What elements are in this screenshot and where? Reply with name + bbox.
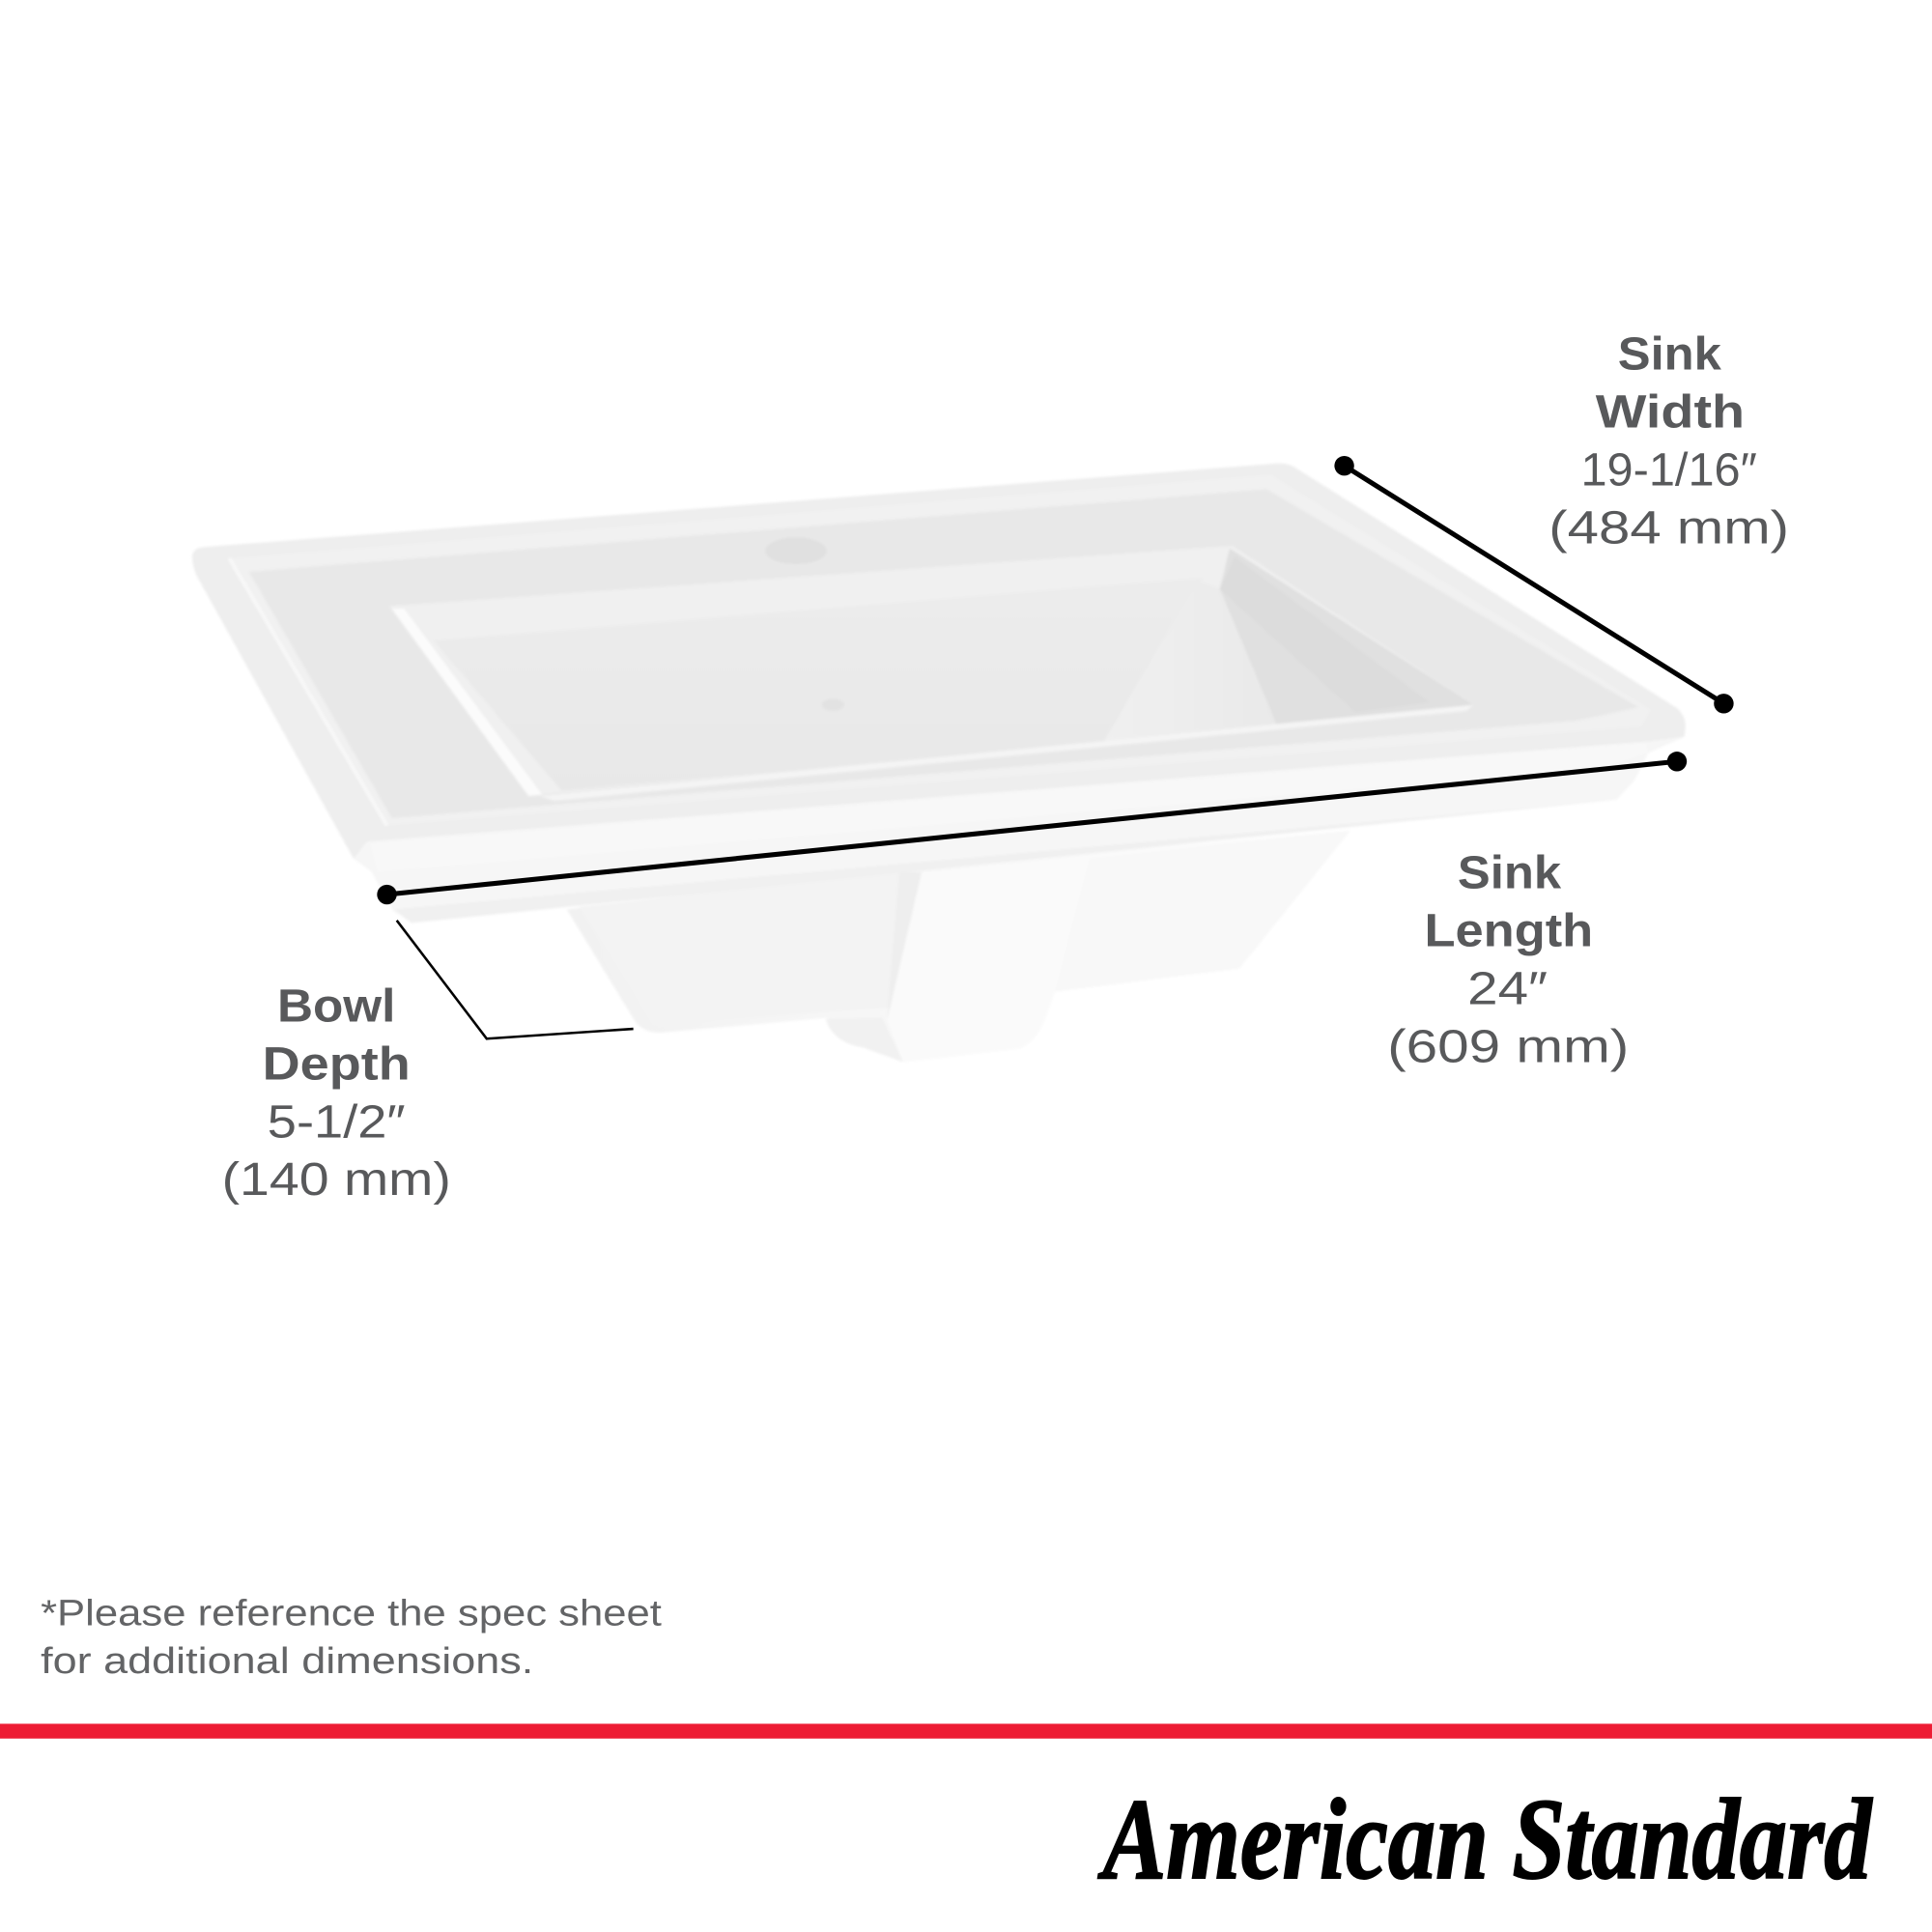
footnote [41,1592,662,1682]
faucet hole [765,537,827,564]
footnote: *Please reference the spec sheet [41,1592,662,1634]
label: sink length: 24″ [1467,963,1548,1015]
label: sink width: Sink [1618,328,1721,381]
label: sink length: Length [1424,905,1593,957]
sink length dimension line [377,752,1687,904]
label: bowl depth: Bowl [277,980,395,1032]
label: sink width [1548,328,1789,554]
label: sink width: (484 mm) [1548,501,1789,554]
bowl depth leader line [397,921,634,1038]
label: bowl depth: 5-1/2″ [268,1095,406,1148]
label: sink length: Sink [1458,847,1561,899]
label: sink width: 19-1/16″ [1580,444,1757,497]
label: sink length [1387,847,1629,1072]
sink top plate [192,464,1686,859]
sink front rim [354,737,1685,923]
label: bowl depth: Depth [263,1037,411,1090]
drain [822,698,844,711]
label: sink length: (609 mm) [1387,1020,1629,1072]
sink width dimension line [1334,456,1734,714]
label: bowl depth [222,980,451,1206]
sink illustration [192,464,1686,1062]
red divider bar [0,1723,1932,1739]
label: sink width: Width [1596,386,1745,439]
footnote: for additional dimensions. [41,1640,533,1682]
sink underside bowl [567,831,1350,1062]
sink basin [389,546,1474,801]
label: bowl depth: (140 mm) [222,1153,451,1206]
